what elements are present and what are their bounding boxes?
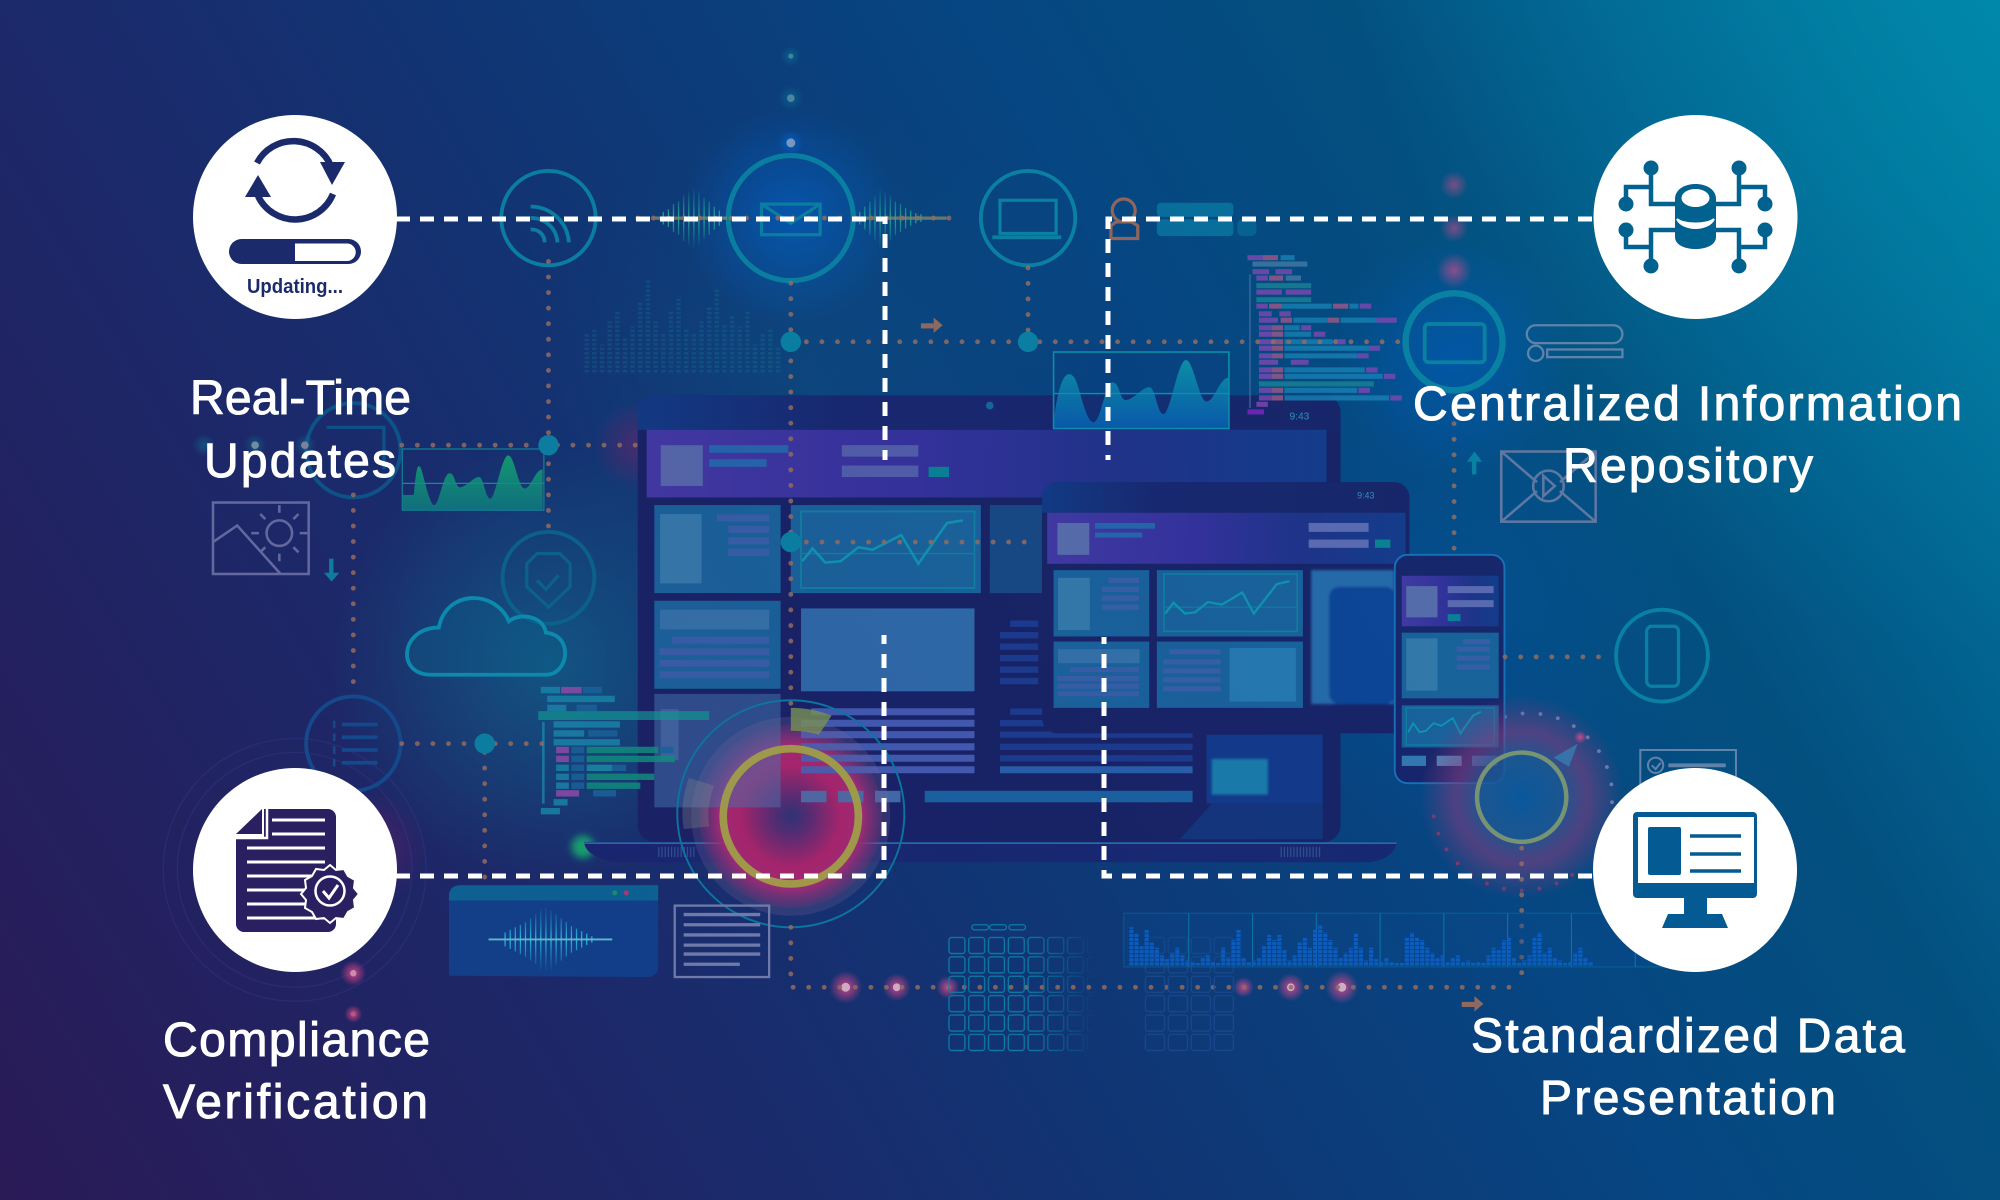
heading: compliance verification: Verification [163,1076,428,1129]
icon disc: monitor [1593,768,1797,972]
laptop tiles and bar [801,791,1193,802]
laptop text lines [801,712,974,770]
keyboard [948,925,1236,1052]
icon: database network [1618,160,1772,274]
heading: standardized data presentation: Standardized Data [1471,1010,1905,1063]
laptop base [584,842,1397,862]
laptop body [638,395,1341,842]
heading: standardized data presentation [1471,1010,1905,1125]
histogram strip [1124,913,1666,967]
panel: standardized data presentation [1593,768,1797,972]
arrow: right rust [921,318,943,333]
phone card: chart [1402,705,1499,747]
phone [1395,555,1504,783]
arrow: right rust bottom [1462,996,1483,1011]
target glow under laptop screen [699,724,883,908]
icon: refresh arrows [245,141,345,219]
glowing dots [193,46,1472,1023]
dashed connector: top right [1108,219,1592,460]
sound wave glow: right of mail [857,189,946,247]
laptop card: profile top [654,505,781,593]
sound wave glow: left of mail [653,186,727,250]
faint rings around compliance disc [163,739,426,1001]
dashed connector: bottom right [1104,637,1592,876]
background technology artwork [163,46,1736,1052]
phone card: profile [1402,633,1499,698]
code block: left [538,690,709,811]
tablet body [1042,482,1409,733]
icon: certified document [236,809,359,932]
target ring over laptop [677,700,904,927]
panel: real-time updates [193,115,397,319]
circle icon: wifi [501,171,596,265]
panel: centralized information repository [1594,115,1798,319]
laptop dim lines right [1000,624,1193,758]
checklist card behind circle [1640,750,1736,839]
tablet card: profile [1054,570,1149,636]
phone body [1395,555,1504,783]
image icon [213,503,309,574]
arrow: up teal [1467,452,1482,474]
tablet [1042,482,1409,733]
green area chart [402,449,544,510]
icon disc: document [193,768,397,972]
heading: real-time updates: Real-Time [190,372,411,425]
document thumbnail [675,906,769,977]
tablet card: line chart [1157,570,1303,636]
arrow: down teal [324,559,339,582]
laptop card: text middle [654,601,781,689]
heading: compliance verification: Compliance [163,1014,430,1067]
updating caption: Updating... [247,276,343,298]
laptop lower right light tile [1180,735,1323,839]
circle icon: tablet [1406,293,1503,390]
tablet blurred card [1311,570,1395,704]
laptop card: bottom [654,694,781,807]
heading: centralized information repository: Repository [1563,440,1813,493]
dotted halo around phone target [1434,713,1612,890]
heading: standardized data presentation: Presentation [1540,1072,1836,1125]
laptop card: line chart [791,505,981,593]
icon disc: updating [193,115,397,319]
dotted connector network [353,218,1614,987]
heading: centralized information repository [1413,378,1962,493]
form icon [1527,325,1622,361]
heading: real-time updates [190,372,411,488]
laptop camera [986,402,994,409]
heading: compliance verification [163,1014,430,1129]
circle icon: laptop [981,171,1075,265]
heading: centralized information repository: Centralized Information [1413,378,1962,431]
phone buttons [1402,756,1497,766]
icon disc: database [1594,115,1798,319]
cloud icon [407,598,565,675]
circle icon: mail [728,156,853,281]
laptop big image tile [801,608,974,691]
dashed connector: top left [396,219,885,460]
dashed connector: bottom left [396,635,884,876]
tablet status clock: 9:43 [1357,491,1375,501]
laptop status clock: 9:43 [1290,412,1310,423]
circle icon: phone [1616,610,1708,702]
target ring near phone [1420,695,1624,899]
icon: monitor dashboard [1633,812,1757,928]
heading: real-time updates: Updates [204,435,396,488]
phone header [1402,576,1499,626]
panel: compliance verification [193,768,397,972]
faint number bars [587,281,778,372]
tablet header [1047,513,1406,564]
connector nodes [474,332,1038,754]
video envelope icon [1501,452,1596,522]
tablet card: text [1054,642,1149,708]
circle icon: shield [503,532,594,624]
laptop card: right dim [990,505,1042,593]
waveform window [449,885,658,977]
laptop header panel [647,430,1327,497]
user icon with pills [1111,199,1256,239]
circle icon: folder behind label [306,403,401,497]
icon: progress bar [229,239,361,264]
code block: top right [1247,258,1402,412]
laptop [584,395,1397,908]
circle icon: list [306,696,401,791]
blue area chart [1054,352,1229,429]
tablet card: image [1157,642,1303,708]
